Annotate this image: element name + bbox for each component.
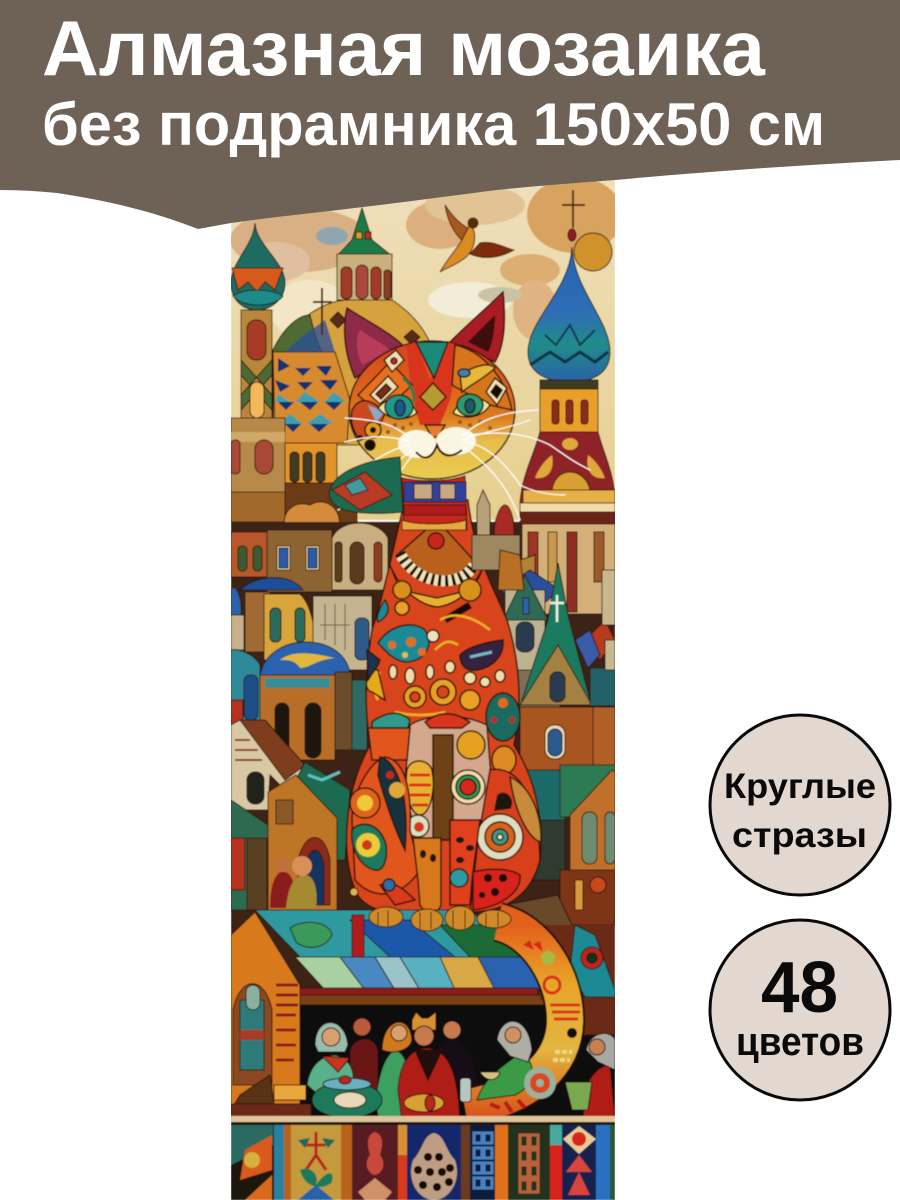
paisley shoulder beside the collar xyxy=(329,457,403,513)
green spire chapel xyxy=(500,555,615,772)
lower left cheek pattern xyxy=(351,401,385,450)
badge: 48 colours xyxy=(710,920,890,1100)
green rings panel xyxy=(508,1125,550,1200)
badge: round rhinestones: стразы xyxy=(732,816,867,855)
figure 5 dark hair xyxy=(440,1021,478,1085)
right rooftop and teal wall xyxy=(505,895,615,1035)
striped oval xyxy=(406,761,433,815)
bottom tapestry panels xyxy=(231,1122,615,1200)
figure 7 at the right xyxy=(583,1033,615,1117)
dark paisley xyxy=(460,640,503,670)
eyes xyxy=(378,394,490,419)
figure 6 green with grey scarf xyxy=(477,1021,532,1100)
ears xyxy=(345,292,504,378)
right onion dome church xyxy=(520,190,615,614)
right haunch xyxy=(470,769,540,912)
great patterned dome xyxy=(273,288,436,485)
navy rings panel xyxy=(470,1125,495,1200)
whiskers xyxy=(338,410,590,520)
badge: round rhinestones xyxy=(710,715,890,895)
title: Алмазная мозаика xyxy=(42,4,766,92)
cream building with pillars xyxy=(313,596,372,670)
freckle dots xyxy=(386,420,492,434)
market figures xyxy=(307,1012,615,1120)
target ring xyxy=(451,770,485,804)
arched bell tower with green spire xyxy=(337,208,392,300)
pots at the right xyxy=(565,1082,592,1110)
buildings upper left row xyxy=(231,523,388,592)
cat collar xyxy=(402,476,467,530)
nose and muzzle xyxy=(398,425,476,458)
teal egg shoulder xyxy=(486,693,520,741)
floor rail xyxy=(231,1116,615,1122)
teal paisley xyxy=(378,625,429,662)
forehead wedge xyxy=(406,342,460,425)
sky with clouds xyxy=(230,170,623,520)
blue dome and yellow house xyxy=(231,578,316,725)
tan church block on the left xyxy=(231,418,357,530)
market roof and stall xyxy=(255,888,545,1005)
tall bottle xyxy=(460,1078,471,1102)
basin with plate xyxy=(312,1076,382,1118)
oval row xyxy=(389,661,505,687)
swirls xyxy=(404,679,480,710)
subtitle: без подрамника 150х50 см xyxy=(42,91,825,158)
lower town dark ground xyxy=(231,521,615,996)
tail around the market xyxy=(465,922,565,1108)
right-side houses between cat and church xyxy=(472,535,524,590)
header banner xyxy=(0,0,900,229)
badge: round rhinestones: Круглые xyxy=(724,767,876,806)
small tower beside the cat xyxy=(477,490,514,535)
front legs xyxy=(413,838,441,912)
face circle xyxy=(349,341,515,479)
gold panel xyxy=(291,1125,341,1200)
mixed panel xyxy=(231,1125,273,1200)
drinking bowl xyxy=(480,1072,500,1080)
cat body xyxy=(347,500,541,915)
mosaic painting: patterned cat over a fairy-tale town xyxy=(230,170,623,1200)
right forehead patterns xyxy=(452,345,512,410)
small red and gold scrolls xyxy=(374,615,490,715)
cat paws xyxy=(369,906,511,931)
gabled stall front xyxy=(231,912,311,1120)
maroon panel xyxy=(352,1125,398,1200)
domed orange arcade xyxy=(260,642,367,760)
navy diamond panel xyxy=(562,1125,596,1200)
left haunch paisley xyxy=(352,757,420,894)
figure 3 orange hair xyxy=(375,1022,415,1117)
badge: 48 colours: цветов xyxy=(736,1020,864,1064)
left gabled houses xyxy=(231,720,350,912)
navy panel with dotted shape xyxy=(407,1125,461,1200)
centre figure red robe xyxy=(398,1012,460,1120)
couple of figures by the house xyxy=(270,856,317,908)
bird xyxy=(440,205,514,272)
left onion tower xyxy=(231,223,285,420)
chest medallion xyxy=(390,520,482,620)
mid cream belly xyxy=(405,716,492,840)
tail patterns xyxy=(490,940,580,1112)
figure 2 maroon xyxy=(350,1018,378,1095)
market interior xyxy=(300,1005,615,1117)
right green-roof gothic house xyxy=(525,765,615,925)
figure 1 green xyxy=(307,1022,353,1092)
badge: 48 colours: 48 xyxy=(761,948,838,1028)
cat head with ears xyxy=(338,292,590,520)
left forehead patterns xyxy=(358,350,414,415)
